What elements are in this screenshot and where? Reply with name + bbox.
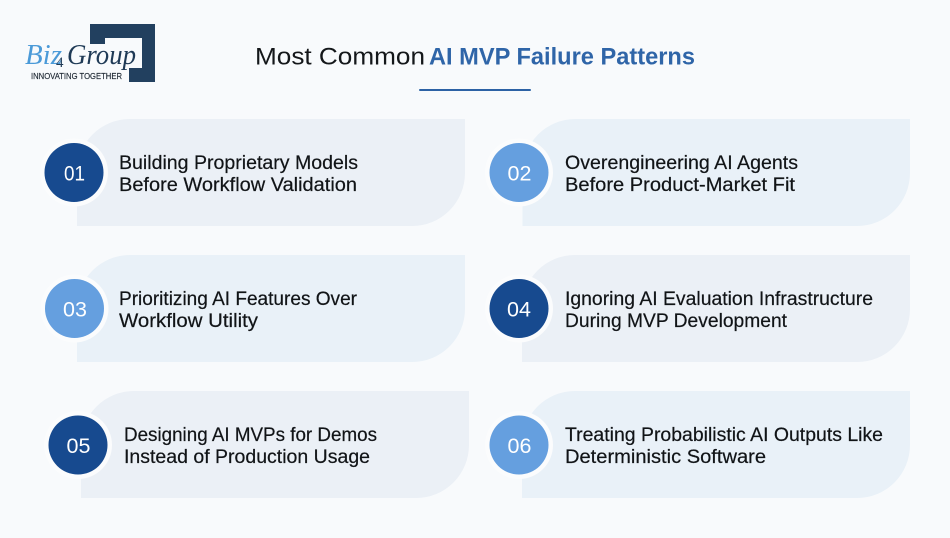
panel: item 01: Building Proprietary Models xyxy=(119,153,358,174)
number badge 04: 04 xyxy=(507,298,531,322)
number badge 06 xyxy=(485,411,553,479)
panel: item 02 xyxy=(485,119,910,226)
panel: item 01 xyxy=(40,119,465,226)
number badge 04 xyxy=(485,274,553,342)
panel: item 02: Before Product-Market Fit xyxy=(565,175,796,196)
title xyxy=(255,44,695,70)
logo xyxy=(25,24,155,82)
panel: item 03 xyxy=(40,255,465,362)
panel: item 06: Deterministic Software xyxy=(565,447,766,468)
panel: item 01: Before Workflow Validation xyxy=(119,175,357,196)
panel: item 04: During MVP Development xyxy=(565,311,788,332)
number badge 06: 06 xyxy=(508,434,531,458)
panel: item 03: Prioritizing AI Features Over xyxy=(119,289,358,310)
logo: Biz xyxy=(25,39,62,71)
number badge 03 xyxy=(40,274,108,342)
number badge 01: 01 xyxy=(64,162,85,186)
title: Most Common xyxy=(255,44,425,70)
title: AI MVP Failure Patterns xyxy=(429,44,695,70)
number badge 05: 05 xyxy=(67,434,90,458)
logo: Group xyxy=(67,40,136,71)
panel: item 06: Treating Probabilistic AI Outputs Like xyxy=(565,425,883,446)
logo: INNOVATING TOGETHER xyxy=(31,72,122,81)
panel: item 05: Instead of Production Usage xyxy=(124,447,370,468)
number badge 03: 03 xyxy=(63,298,87,322)
panel: item 06 xyxy=(485,391,910,498)
panel: item 02: Overengineering AI Agents xyxy=(565,153,798,174)
panel: item 05: Designing AI MVPs for Demos xyxy=(124,425,377,446)
panel: item 04: Ignoring AI Evaluation Infrastructure xyxy=(565,289,873,310)
panel: item 05 xyxy=(44,391,469,498)
number badge 02: 02 xyxy=(508,162,531,186)
panel: item 03: Workflow Utility xyxy=(119,311,259,332)
title underline xyxy=(419,89,531,91)
logo: 4 xyxy=(56,55,64,71)
number badge 02 xyxy=(485,138,553,206)
number badge 05 xyxy=(44,411,112,479)
panel: item 04 xyxy=(485,255,910,362)
number badge 01 xyxy=(40,138,108,206)
